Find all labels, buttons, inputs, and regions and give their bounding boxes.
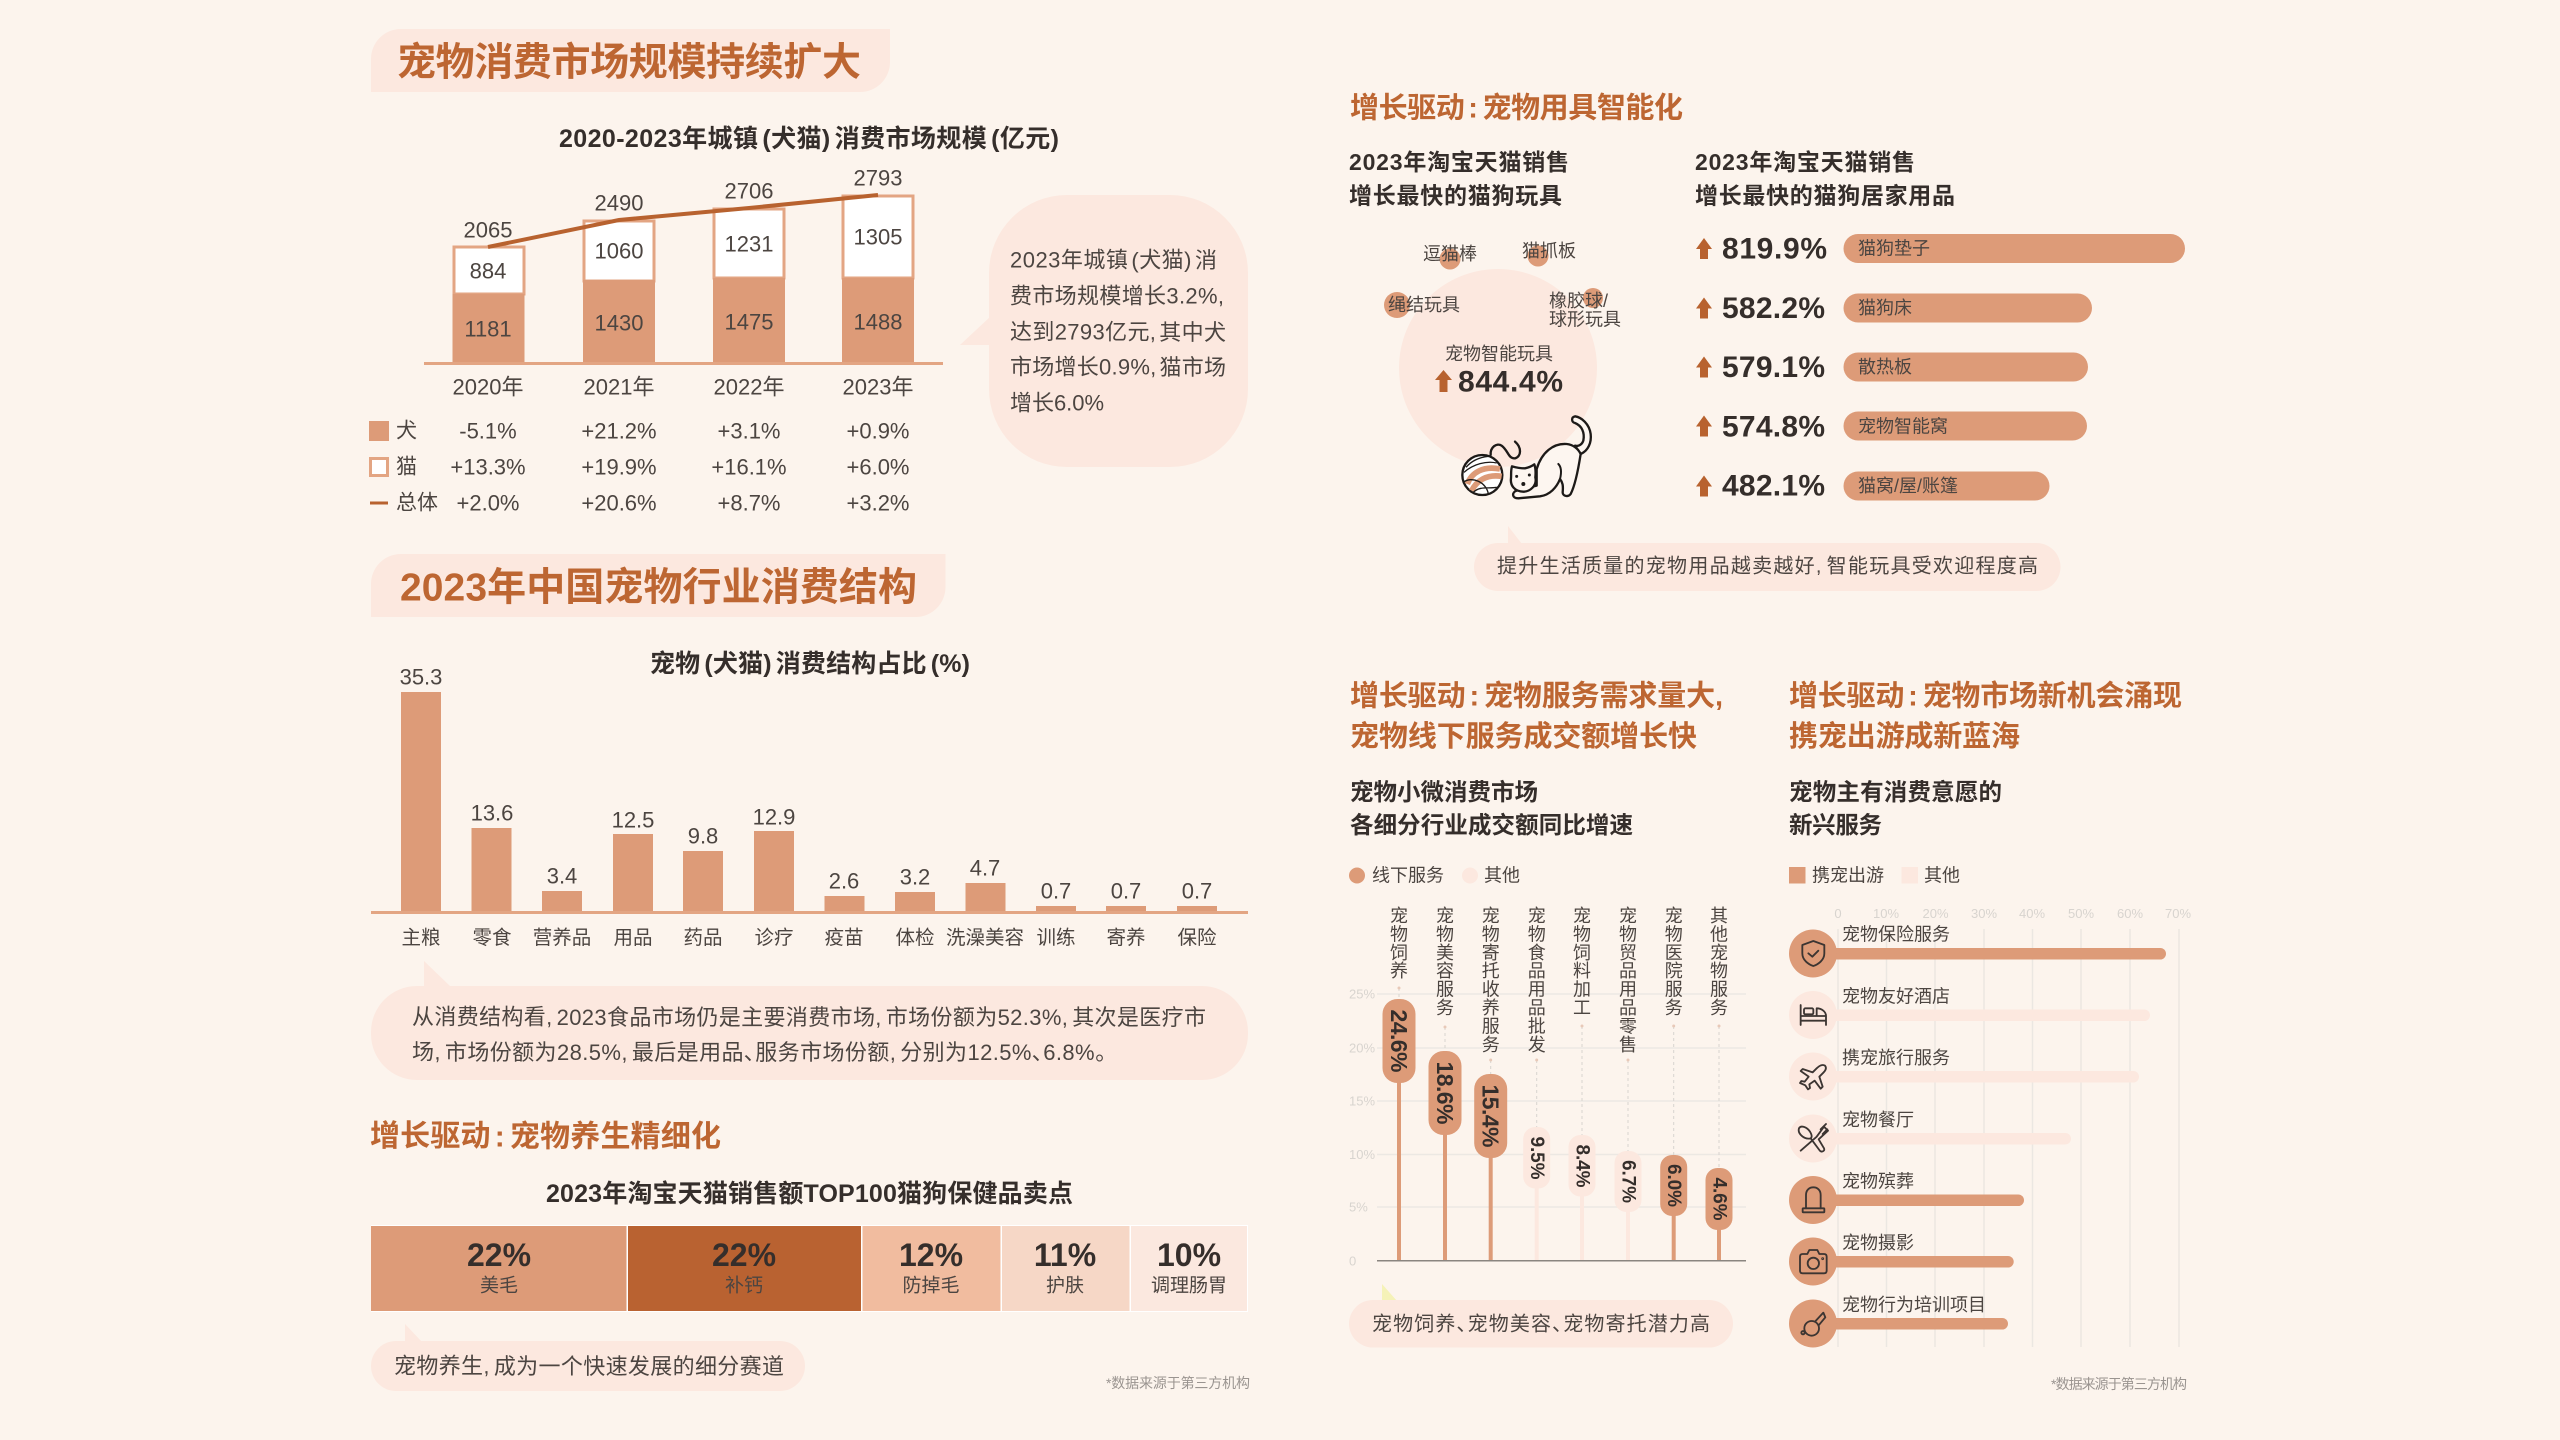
bar chart: consumption structure: 3.2 [900, 864, 930, 890]
list: fastest growing home products: 482.1% [1722, 470, 1825, 502]
bubble diagram: fastest growing toys: 逗猫棒 [1423, 244, 1477, 264]
bubble diagram: fastest growing toys: 猫抓板 [1522, 241, 1576, 261]
heading: services driver [1350, 680, 1723, 753]
bar chart: consumption structure: 营养品 [533, 927, 591, 949]
list: fastest growing home products [1696, 232, 2185, 502]
lollipop chart: services growth: 15.4% [1478, 1084, 1504, 1148]
callout: services summary: 宠物饲养、宠物美容、宠物寄托潜力高 [1372, 1312, 1710, 1336]
stacked bar chart: market size: 1488 [854, 310, 902, 334]
list: fastest growing home products: 579.1% [1722, 351, 1825, 384]
treemap: health care selling points: 调理肠胃 [1151, 1274, 1227, 1296]
footnote right: *数据来源于第三方机构 [2051, 1376, 2187, 1392]
lollipop chart: services growth: 25% [1349, 986, 1375, 1002]
stacked bar chart: market size: 1475 [725, 310, 773, 334]
bubble diagram: fastest growing toys: 绳结玩具 [1388, 295, 1460, 315]
bar chart: consumption structure: 洗澡美容 [946, 927, 1024, 949]
horizontal bar chart: emerging services: 0 [1834, 906, 1842, 921]
horizontal bar chart: emerging services: 携宠旅行服务 [1842, 1048, 1950, 1068]
callout: market size summary: 2023年城镇(犬猫)消 [1010, 248, 1217, 272]
legend: emerging services [1789, 866, 1960, 886]
lollipop chart: services growth [1349, 906, 1746, 1268]
treemap: health care selling points: 护肤 [1046, 1274, 1084, 1296]
list: fastest growing home products: 574.8% [1722, 410, 1825, 444]
legend and growth table: +3.1% [718, 418, 780, 444]
lollipop chart: services growth: 9.5% [1526, 1136, 1547, 1180]
treemap: health care selling points: 10% [1157, 1237, 1221, 1273]
lollipop chart: services growth: 20% [1349, 1040, 1375, 1056]
heading: pet travel driver [1789, 680, 2182, 753]
subheading: emerging services: 新兴服务 [1789, 812, 1882, 838]
treemap: health care selling points [371, 1225, 1248, 1312]
stacked bar chart: market size: 1430 [595, 310, 643, 336]
legend and growth table: +8.7% [718, 490, 780, 516]
callout: market size summary [960, 195, 1248, 467]
chart title: health care selling points: 2023年淘宝天猫销售额TOP100猫狗保健品卖点 [546, 1180, 1073, 1208]
subheading: toys [1349, 149, 1569, 208]
stacked bar chart: market size: 2020年 [453, 374, 523, 400]
callout: market size summary: 达到2793亿元,其中犬 [1010, 320, 1226, 344]
bar chart: consumption structure: 35.3 [400, 664, 442, 690]
heading: services driver: 增长驱动:宠物服务需求量大, [1350, 680, 1723, 712]
callout: consumption structure summary: 场,市场份额为28.5%,最后是用品、服务市场份额,分别为12.5%、6.8%。 [412, 1040, 1106, 1064]
subheading: services: 各细分行业成交额同比增速 [1350, 811, 1633, 838]
horizontal bar chart: emerging services: 30% [1971, 906, 1997, 921]
subheading: emerging services: 宠物主有消费意愿的 [1789, 778, 2002, 805]
bar chart: consumption structure: 0.7 [1111, 878, 1141, 904]
list: fastest growing home products: 散热板 [1858, 357, 1912, 377]
bar chart: consumption structure: 体检 [895, 927, 935, 949]
bar chart: consumption structure: 用品 [613, 927, 653, 949]
callout: health care summary [371, 1324, 805, 1391]
legend and growth table: +13.3% [450, 454, 526, 480]
lollipop chart: services growth: 4.6% [1708, 1178, 1730, 1221]
footnote left: *数据来源于第三方机构 [1106, 1375, 1250, 1391]
bubble diagram: fastest growing toys: 844.4% [1458, 366, 1563, 398]
callout: health care summary: 宠物养生,成为一个快速发展的细分赛道 [394, 1354, 784, 1378]
list: fastest growing home products: 猫窝/屋/账篷 [1858, 476, 1958, 496]
legend: emerging services: 其他 [1924, 866, 1960, 886]
horizontal bar chart: emerging services: 10% [1873, 906, 1899, 921]
bar chart: consumption structure: 9.8 [688, 824, 718, 848]
stacked bar chart: market size: 884 [470, 258, 506, 284]
stacked bar chart: market size [424, 166, 943, 400]
heading: pet travel driver: 增长驱动:宠物市场新机会涌现 [1789, 680, 2182, 712]
legend and growth table: 猫 [396, 456, 417, 478]
legend: emerging services: 携宠出游 [1812, 866, 1884, 886]
bar chart: consumption structure: 零食 [472, 927, 512, 949]
legend and growth table: +16.1% [711, 454, 787, 480]
subheading: home products [1695, 149, 1955, 208]
subheading: emerging services [1789, 778, 2002, 838]
horizontal bar chart: emerging services: 宠物摄影 [1842, 1233, 1914, 1253]
list: fastest growing home products: 宠物智能窝 [1858, 416, 1948, 436]
bar chart: consumption structure: 3.4 [547, 864, 577, 888]
lollipop chart: services growth: 宠物饲料加工 [1573, 906, 1591, 1018]
lollipop chart: services growth: 6.0% [1663, 1164, 1684, 1207]
bubble diagram: fastest growing toys: 橡胶球/ [1549, 291, 1608, 311]
heading: smart products driver: 增长驱动:宠物用具智能化 [1350, 92, 1683, 124]
stacked bar chart: market size: 2706 [725, 178, 773, 204]
legend and growth table: 总体 [396, 492, 438, 514]
treemap: health care selling points: 22% [467, 1237, 531, 1273]
lollipop chart: services growth: 18.6% [1432, 1062, 1458, 1124]
bar chart: consumption structure: 2.6 [829, 868, 859, 894]
heading: market size section [371, 29, 890, 92]
lollipop chart: services growth: 宠物医院服务 [1665, 906, 1683, 1018]
heading: consumption structure section [371, 554, 946, 617]
legend and growth table: +3.2% [846, 490, 910, 516]
horizontal bar chart: emerging services: 宠物殡葬 [1842, 1172, 1914, 1192]
lollipop chart: services growth: 宠物贸品用品零售 [1619, 906, 1637, 1055]
subheading: home products: 2023年淘宝天猫销售 [1695, 149, 1915, 175]
horizontal bar chart: emerging services: 20% [1922, 906, 1949, 921]
chart title: market size: 2020-2023年城镇(犬猫)消费市场规模(亿元) [559, 124, 1059, 153]
legend and growth table: 犬 [396, 420, 417, 442]
horizontal bar chart: emerging services: 50% [2068, 906, 2094, 921]
bar chart: consumption structure [371, 664, 1248, 949]
treemap: health care selling points: 11% [1034, 1237, 1096, 1273]
callout: market size summary: 市场增长0.9%,猫市场 [1010, 354, 1226, 380]
legend and growth table: -5.1% [459, 418, 517, 444]
bar chart: consumption structure: 药品 [683, 927, 723, 949]
bubble diagram: fastest growing toys [1384, 241, 1621, 467]
subheading: services: 宠物小微消费市场 [1350, 779, 1538, 805]
bar chart: consumption structure: 0.7 [1041, 878, 1071, 904]
bar chart: consumption structure: 训练 [1036, 927, 1076, 949]
bar chart: consumption structure: 12.9 [753, 804, 795, 830]
horizontal bar chart: emerging services: 宠物友好酒店 [1842, 986, 1950, 1006]
callout: smart products summary: 提升生活质量的宠物用品越卖越好, 智能玩具受欢迎程度高 [1497, 554, 2038, 578]
lollipop chart: services growth: 宠物食品用品批发 [1528, 906, 1546, 1055]
subheading: home products: 增长最快的猫狗居家用品 [1695, 182, 1955, 208]
legend and growth table: +6.0% [846, 454, 910, 480]
lollipop chart: services growth: 其他宠物服务 [1710, 906, 1728, 1018]
list: fastest growing home products: 819.9% [1722, 232, 1827, 266]
horizontal bar chart: emerging services: 60% [2117, 906, 2143, 921]
lollipop chart: services growth: 24.6% [1386, 1010, 1412, 1072]
bar chart: consumption structure: 4.7 [970, 856, 1000, 880]
heading: consumption structure section: 2023年中国宠物行业消费结构 [400, 566, 917, 610]
lollipop chart: services growth: 5% [1349, 1200, 1368, 1214]
stacked bar chart: market size: 2490 [595, 190, 643, 216]
bubble diagram: fastest growing toys: 球形玩具 [1549, 310, 1621, 330]
horizontal bar chart: emerging services [1789, 906, 2191, 1348]
legend: services [1349, 866, 1520, 886]
illustration: cat and yarn ball [1462, 416, 1591, 498]
callout: consumption structure summary [371, 961, 1248, 1080]
stacked bar chart: market size: 1231 [725, 232, 773, 256]
legend and growth table: +19.9% [581, 454, 657, 480]
legend and growth table: +0.9% [846, 418, 910, 444]
lollipop chart: services growth: 宠物寄托收养服务 [1482, 906, 1500, 1055]
heading: services driver: 宠物线下服务成交额增长快 [1350, 720, 1697, 753]
treemap: health care selling points: 补钙 [725, 1274, 763, 1296]
treemap: health care selling points: 22% [712, 1237, 776, 1273]
callout: services summary [1349, 1284, 1733, 1348]
bar chart: consumption structure: 13.6 [471, 800, 513, 826]
icons: service row symbols [1799, 941, 1828, 1336]
heading: market size section: 宠物消费市场规模持续扩大 [397, 42, 861, 84]
stacked bar chart: market size: 2022年 [714, 374, 784, 400]
treemap: health care selling points: 美毛 [480, 1274, 518, 1296]
bar chart: consumption structure: 诊疗 [754, 927, 794, 949]
bar chart: consumption structure: 主粮 [401, 927, 441, 949]
heading: health care driver: 增长驱动:宠物养生精细化 [370, 1120, 721, 1153]
treemap: health care selling points: 12% [899, 1237, 963, 1273]
callout: market size summary: 费市场规模增长3.2%, [1010, 284, 1224, 308]
bar chart: consumption structure: 保险 [1177, 927, 1217, 949]
bar chart: consumption structure: 12.5 [612, 808, 654, 832]
lollipop chart: services growth: 宠物美容服务 [1436, 906, 1454, 1018]
stacked bar chart: market size: 1305 [854, 224, 902, 250]
lollipop chart: services growth: 10% [1349, 1147, 1375, 1162]
subheading: toys: 增长最快的猫狗玩具 [1349, 182, 1562, 208]
lollipop chart: services growth: 宠物饲养 [1390, 906, 1408, 981]
callout: consumption structure summary: 从消费结构看,2023食品市场仍是主要消费市场,市场份额为52.3%,其次是医疗市 [412, 1004, 1206, 1030]
treemap: health care selling points: 防掉毛 [902, 1274, 960, 1296]
stacked bar chart: market size: 2793 [854, 166, 902, 190]
horizontal bar chart: emerging services: 宠物保险服务 [1842, 924, 1950, 944]
bar chart: consumption structure: 寄养 [1106, 927, 1146, 949]
legend and growth table: +21.2% [581, 418, 657, 444]
legend and growth table: +2.0% [456, 490, 520, 516]
subheading: toys: 2023年淘宝天猫销售 [1349, 149, 1569, 175]
stacked bar chart: market size: 1060 [595, 238, 643, 264]
chart title: consumption structure: 宠物(犬猫)消费结构占比(%) [650, 650, 970, 678]
lollipop chart: services growth: 0 [1349, 1254, 1356, 1268]
stacked bar chart: market size: 2021年 [584, 374, 654, 400]
legend: services: 线下服务 [1372, 866, 1444, 886]
horizontal bar chart: emerging services: 40% [2019, 906, 2045, 921]
list: fastest growing home products: 猫狗床 [1858, 298, 1912, 318]
bar chart: consumption structure: 0.7 [1182, 878, 1212, 904]
lollipop chart: services growth: 6.7% [1618, 1160, 1638, 1203]
list: fastest growing home products: 猫狗垫子 [1858, 238, 1930, 258]
lollipop chart: services growth: 15% [1349, 1094, 1375, 1108]
legend and growth table: +20.6% [581, 490, 657, 516]
legend: services: 其他 [1484, 866, 1520, 886]
horizontal bar chart: emerging services: 宠物行为培训项目 [1842, 1295, 1986, 1315]
horizontal bar chart: emerging services: 宠物餐厅 [1842, 1110, 1914, 1130]
legend and growth table [369, 418, 910, 516]
stacked bar chart: market size: 2023年 [843, 374, 913, 400]
lollipop chart: services growth: 8.4% [1572, 1144, 1592, 1188]
stacked bar chart: market size: 1181 [464, 316, 512, 342]
callout: market size summary: 增长6.0% [1010, 390, 1104, 416]
bubble diagram: fastest growing toys: 宠物智能玩具 [1445, 344, 1553, 364]
callout: smart products summary [1474, 526, 2060, 591]
bar chart: consumption structure: 疫苗 [824, 927, 864, 949]
subheading: services [1350, 779, 1633, 838]
heading: pet travel driver: 携宠出游成新蓝海 [1789, 720, 2020, 753]
stacked bar chart: market size: 2065 [464, 218, 512, 242]
list: fastest growing home products: 582.2% [1722, 292, 1825, 325]
horizontal bar chart: emerging services: 70% [2165, 906, 2191, 921]
